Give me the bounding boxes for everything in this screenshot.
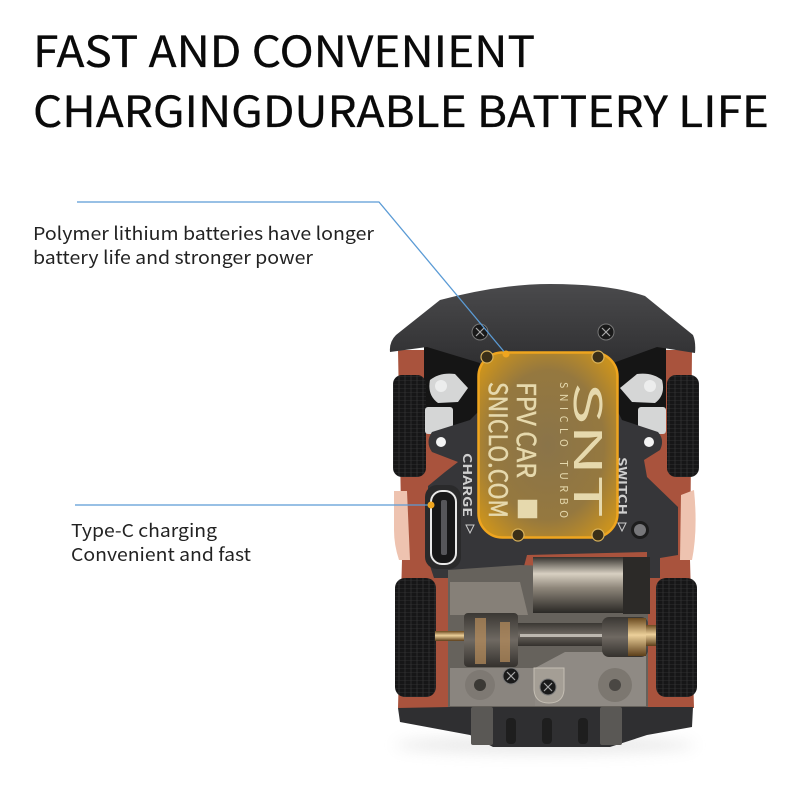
battery label text: SNICLO TURBO — [556, 382, 571, 518]
callout: type-C leader line — [75, 502, 434, 508]
chassis labels — [459, 453, 631, 517]
white steering parts — [425, 374, 666, 434]
rear bumper pegs — [471, 707, 622, 745]
panel corner screws — [481, 351, 604, 541]
title: FAST AND CONVENIENT — [33, 18, 535, 80]
chassis holes — [436, 437, 654, 447]
motor — [533, 557, 650, 614]
chassis labels: CHARGE — [459, 453, 476, 517]
switch button — [466, 521, 649, 539]
rear bumper — [398, 707, 693, 747]
USB-C port — [425, 485, 461, 569]
front tyres — [393, 375, 699, 477]
text block: charging description: Type-C charging — [71, 517, 217, 543]
rear axle and gears — [435, 613, 656, 667]
battery label text — [481, 382, 618, 518]
text block: charging description: Convenient and fast — [71, 541, 251, 567]
battery highlight panel — [478, 351, 618, 541]
screws — [472, 324, 614, 695]
battery label text: FPV CAR — [509, 382, 546, 478]
title: CHARGINGDURABLE BATTERY LIFE — [33, 78, 769, 140]
rear metal base — [448, 565, 648, 707]
title — [33, 18, 769, 140]
central chassis plate — [428, 352, 678, 578]
text block: battery description: battery life and stronger power — [33, 244, 314, 270]
text block: battery description: Polymer lithium batteries have longer — [33, 220, 375, 246]
front bumper — [390, 284, 695, 363]
battery label text: SNICLO.COM — [481, 382, 517, 518]
battery label text: SNT — [563, 382, 618, 518]
dark steering cavities — [424, 345, 666, 432]
car chassis photo illustration — [390, 284, 699, 754]
text block: charging description — [71, 517, 251, 567]
rear tyres — [395, 578, 697, 697]
chassis labels: SWITCH — [614, 457, 631, 515]
callout: battery leader line — [77, 202, 510, 358]
text block: battery description — [33, 220, 375, 270]
mounting holes and washer — [465, 668, 632, 703]
pale side panels — [394, 490, 696, 560]
red car body — [398, 350, 694, 708]
